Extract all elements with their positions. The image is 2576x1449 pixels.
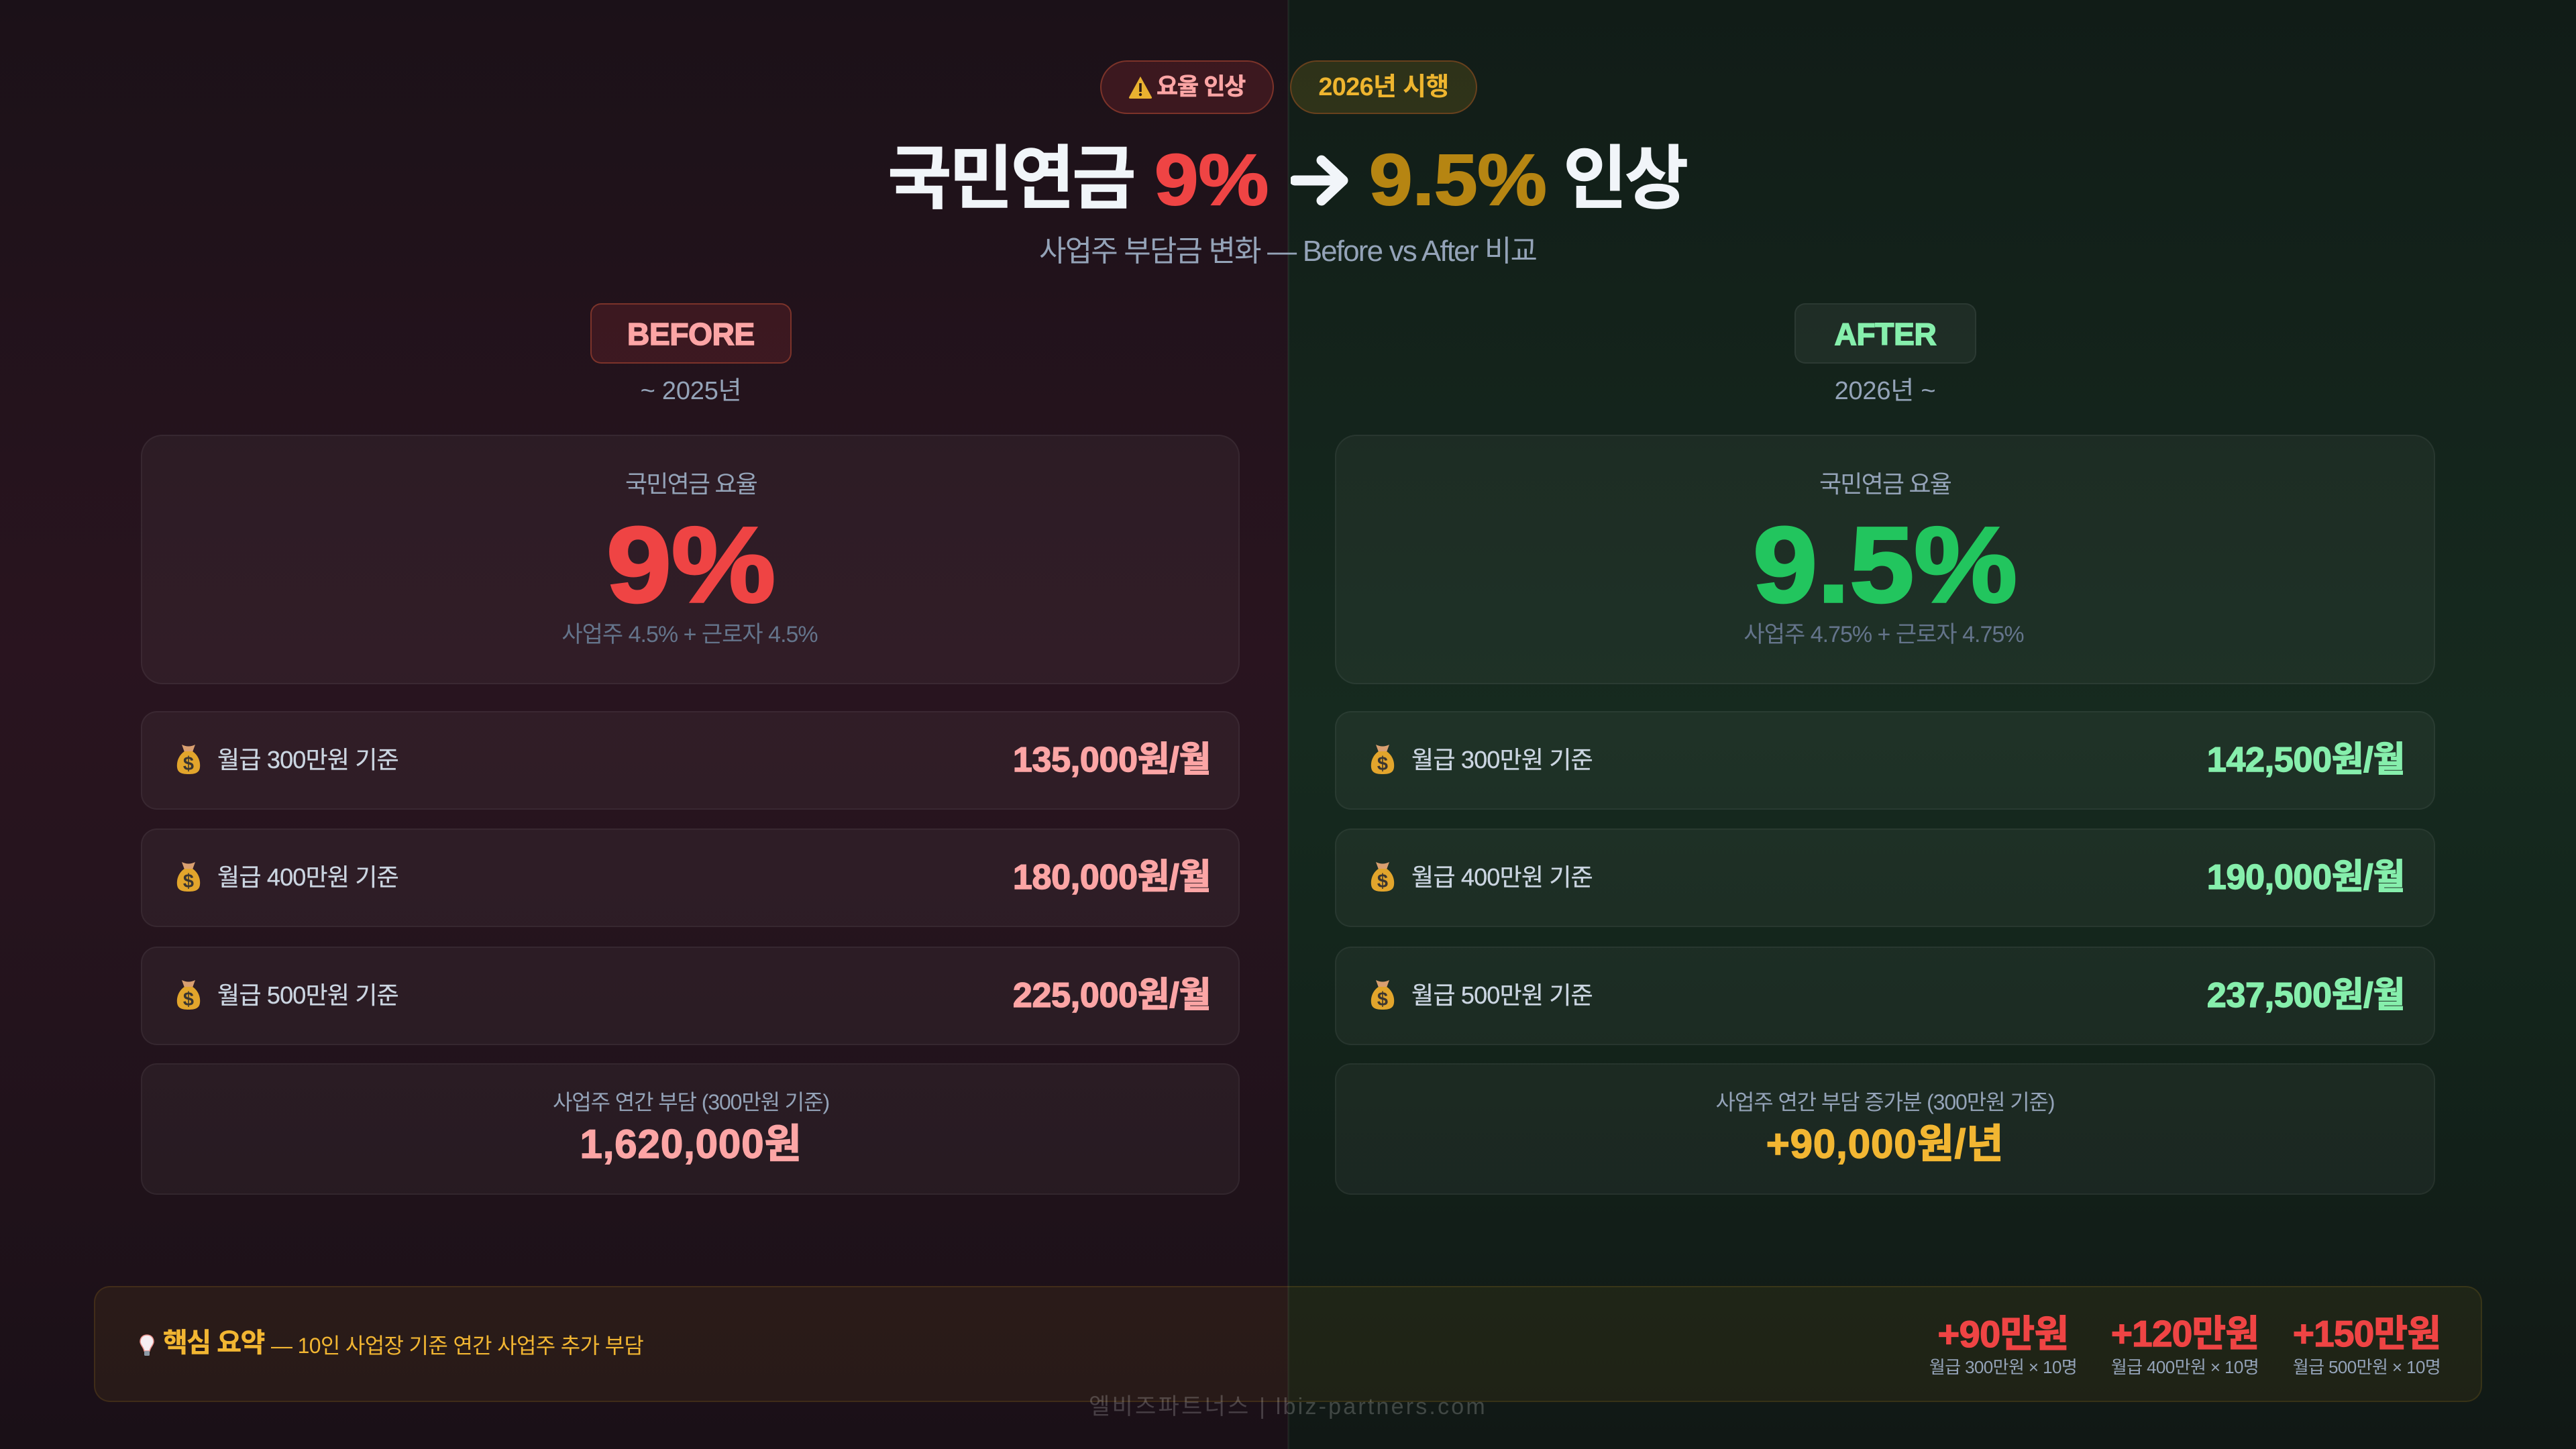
rate split: 사업주 4.75% + 근로자 4.75%: [1743, 622, 2024, 647]
before label: BEFORE: [627, 317, 755, 352]
title: 9.5%: 9.5%: [1369, 139, 1547, 220]
stat label: 월급 400만원 × 10명: [2111, 1357, 2259, 1377]
subtitle: 사업주 부담금 변화 — Before vs After 비교: [1039, 235, 1536, 268]
icon: money bag: $: [183, 871, 194, 892]
row: 300 after: [1335, 711, 2435, 810]
annual label: 사업주 연간 부담 (300만원 기준): [553, 1090, 829, 1114]
title: 9%: 9%: [1155, 139, 1269, 220]
annual label: 사업주 연간 부담 증가분 (300만원 기준): [1716, 1090, 2054, 1114]
summary heading: 핵심 요약: [163, 1328, 264, 1358]
row label: 월급 400만원 기준: [217, 863, 398, 891]
card: rate before: [141, 435, 1240, 684]
row label: 월급 500만원 기준: [1411, 981, 1593, 1009]
row value: 135,000원/월: [1013, 741, 1211, 780]
card: rate after: [1335, 435, 2435, 684]
icon: money bag: [1371, 862, 1394, 892]
background: after side: [1288, 0, 2576, 1449]
before badge: [590, 303, 792, 364]
after badge: [1794, 303, 1976, 364]
icon: money bag: $: [183, 753, 194, 775]
icon: money bag: $: [1377, 753, 1388, 775]
row: 400 after: [1335, 828, 2435, 927]
icon: money bag: $: [183, 989, 194, 1010]
annual value: 1,620,000원: [580, 1122, 802, 1167]
stat: 120: [2111, 1313, 2259, 1377]
row value: 180,000원/월: [1013, 858, 1211, 897]
card: annual after: [1335, 1063, 2435, 1195]
icon: money bag: $: [1377, 871, 1388, 892]
icon: money bag: [1371, 745, 1394, 775]
icon: money bag: [177, 980, 200, 1010]
title: 인상: 인상: [1563, 140, 1686, 218]
rate split: 사업주 4.5% + 근로자 4.5%: [561, 622, 818, 647]
icon: warning: [1128, 76, 1152, 99]
icon: money bag: [1371, 980, 1394, 1010]
icon: money bag: $: [1377, 989, 1388, 1010]
row value: 190,000원/월: [2207, 858, 2405, 897]
icon: money bag: [177, 862, 200, 892]
after label: AFTER: [1835, 317, 1936, 352]
panel: before: [141, 303, 1240, 1195]
rate value: 9%: [606, 504, 775, 625]
stat: 90: [1929, 1313, 2077, 1377]
row value: 142,500원/월: [2207, 741, 2405, 780]
before period: ~ 2025년: [641, 377, 741, 405]
panel: after: [1335, 303, 2435, 1195]
icon: money bag: [177, 745, 200, 775]
icon: light bulb: [140, 1334, 154, 1356]
row value: 225,000원/월: [1013, 976, 1211, 1015]
stat label: 월급 500만원 × 10명: [2293, 1357, 2440, 1377]
row: 400 before: [141, 828, 1240, 927]
background: before side: [0, 0, 1288, 1449]
row label: 월급 300만원 기준: [217, 746, 398, 773]
stat: 150: [2293, 1313, 2440, 1377]
after period: 2026년 ~: [1835, 377, 1935, 405]
card: annual before: [141, 1063, 1240, 1195]
row label: 월급 400만원 기준: [1411, 863, 1593, 891]
summary bar: [94, 1286, 2482, 1402]
header badge: rate increase: [1100, 60, 1274, 114]
summary text: — 10인 사업장 기준 연간 사업주 추가 부담: [271, 1334, 643, 1358]
badge label: 2026년 시행: [1318, 73, 1449, 101]
annual value: +90,000원/년: [1766, 1122, 2004, 1167]
arrow: [1291, 156, 1348, 205]
title: [888, 139, 1687, 220]
row label: 월급 300만원 기준: [1411, 746, 1593, 773]
stat value: +150만원: [2293, 1313, 2440, 1354]
header badge: 2026: [1290, 60, 1477, 114]
row: 500 after: [1335, 947, 2435, 1045]
stat label: 월급 300만원 × 10명: [1929, 1357, 2077, 1377]
badge label: 요율 인상: [1157, 74, 1245, 100]
stat value: +120만원: [2111, 1313, 2259, 1354]
rate label: 국민연금 요율: [625, 470, 757, 498]
footer credit: 엘비즈파트너스 | lbiz-partners.com: [1089, 1394, 1487, 1419]
stat value: +90만원: [1937, 1313, 2069, 1355]
row value: 237,500원/월: [2207, 976, 2405, 1015]
rate value: 9.5%: [1753, 504, 2017, 625]
row: 500 before: [141, 947, 1240, 1045]
row label: 월급 500만원 기준: [217, 981, 398, 1009]
center divider: [1287, 0, 1289, 1449]
row: 300 before: [141, 711, 1240, 810]
rate label: 국민연금 요율: [1819, 470, 1951, 498]
title: 국민연금: 국민연금: [888, 140, 1134, 218]
